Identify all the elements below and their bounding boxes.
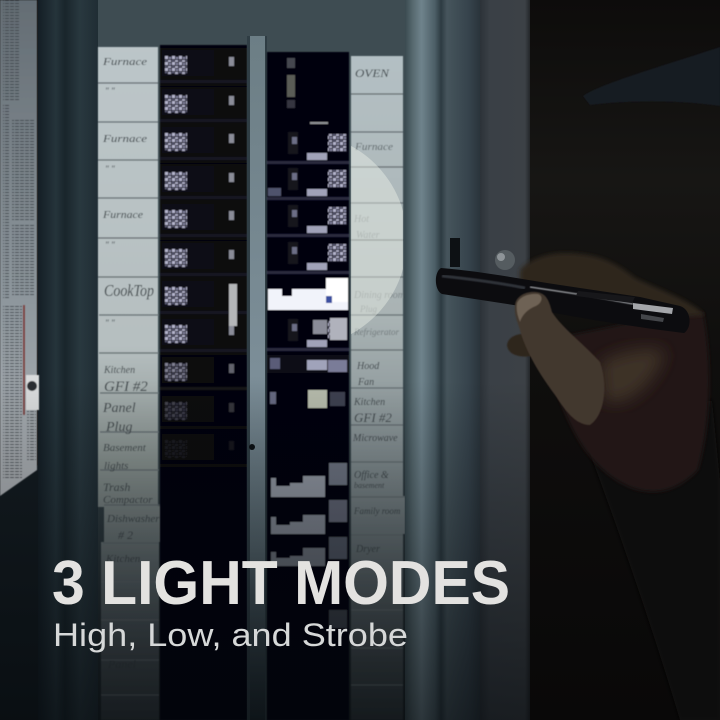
right breakers column [267, 52, 349, 720]
heading: 3 LIGHT MODES [52, 549, 510, 618]
left circuit labels: Compactor [103, 494, 153, 506]
door notch [450, 238, 460, 267]
right circuit labels: Microwave [352, 433, 398, 444]
thumb [515, 292, 604, 425]
flashlight beam spot [351, 146, 403, 334]
left circuit labels: Furnace [102, 209, 143, 221]
hand holding flashlight [436, 253, 720, 720]
left circuit labels: Furnace [102, 56, 147, 68]
thumbnail [517, 294, 542, 322]
right circuit labels: OVEN [355, 66, 390, 80]
right circuit labels: Furnace [354, 141, 393, 153]
left circuit labels: " " [105, 86, 115, 96]
left circuit labels: Panel [102, 401, 136, 416]
index finger [520, 253, 705, 318]
right circuit labels [351, 56, 405, 720]
left circuit labels: " " [105, 164, 115, 174]
left breakers column [160, 45, 247, 720]
left circuit labels: # 2 [118, 528, 133, 542]
breaker panel [98, 0, 405, 720]
left circuit labels [98, 47, 162, 720]
right circuit labels: Dryer [355, 544, 380, 555]
door knob [495, 250, 515, 270]
left circuit labels: lights [104, 460, 128, 472]
right circuit labels: basement [354, 481, 385, 490]
left circuit labels: Panel [107, 657, 137, 671]
forearm [585, 400, 720, 720]
left circuit labels: Kitchen [103, 365, 135, 376]
left circuit labels: Furnace [102, 133, 147, 145]
right circuit labels: Water [356, 230, 380, 241]
wall poster on left [0, 0, 39, 496]
left circuit labels: " " [105, 240, 115, 250]
left circuit labels: Plug [105, 420, 132, 435]
left circuit labels: Dishwasher [106, 513, 160, 525]
subheading: High, Low, and Strobe [53, 617, 408, 653]
right circuit labels: Kitchen [353, 397, 385, 408]
left circuit labels: Trash [103, 480, 130, 494]
left circuit labels: Basement [103, 442, 147, 454]
right circuit labels: GFI #2 [354, 410, 392, 425]
left circuit labels: GFI #2 [104, 379, 148, 395]
hat brim [583, 47, 720, 106]
palm [545, 312, 709, 492]
highlight on palm [600, 349, 665, 402]
left metal frame [38, 0, 98, 720]
right circuit labels: Dining room [353, 290, 405, 301]
right circuit labels: Hood [356, 361, 380, 372]
right circuit labels: Hot [353, 214, 369, 225]
bottom shade over panel [0, 380, 530, 720]
left circuit labels: " " [105, 318, 115, 328]
left circuit labels: Kitchen [105, 553, 141, 565]
left circuit labels: CookTop [104, 281, 154, 300]
right circuit labels: Plug [359, 304, 377, 314]
right circuit labels: Fan [357, 377, 374, 388]
panel backing [98, 0, 405, 720]
brightest lit breaker [268, 278, 348, 310]
middle finger tip [507, 334, 532, 357]
right circuit labels: Family room [353, 506, 401, 516]
door frame [405, 0, 530, 720]
center divider strip [247, 36, 267, 720]
right circuit labels: Refrigerator [353, 327, 399, 337]
lower-left dark wall [0, 465, 38, 720]
right circuit labels: Office & [354, 470, 389, 481]
flashlight [436, 268, 690, 333]
